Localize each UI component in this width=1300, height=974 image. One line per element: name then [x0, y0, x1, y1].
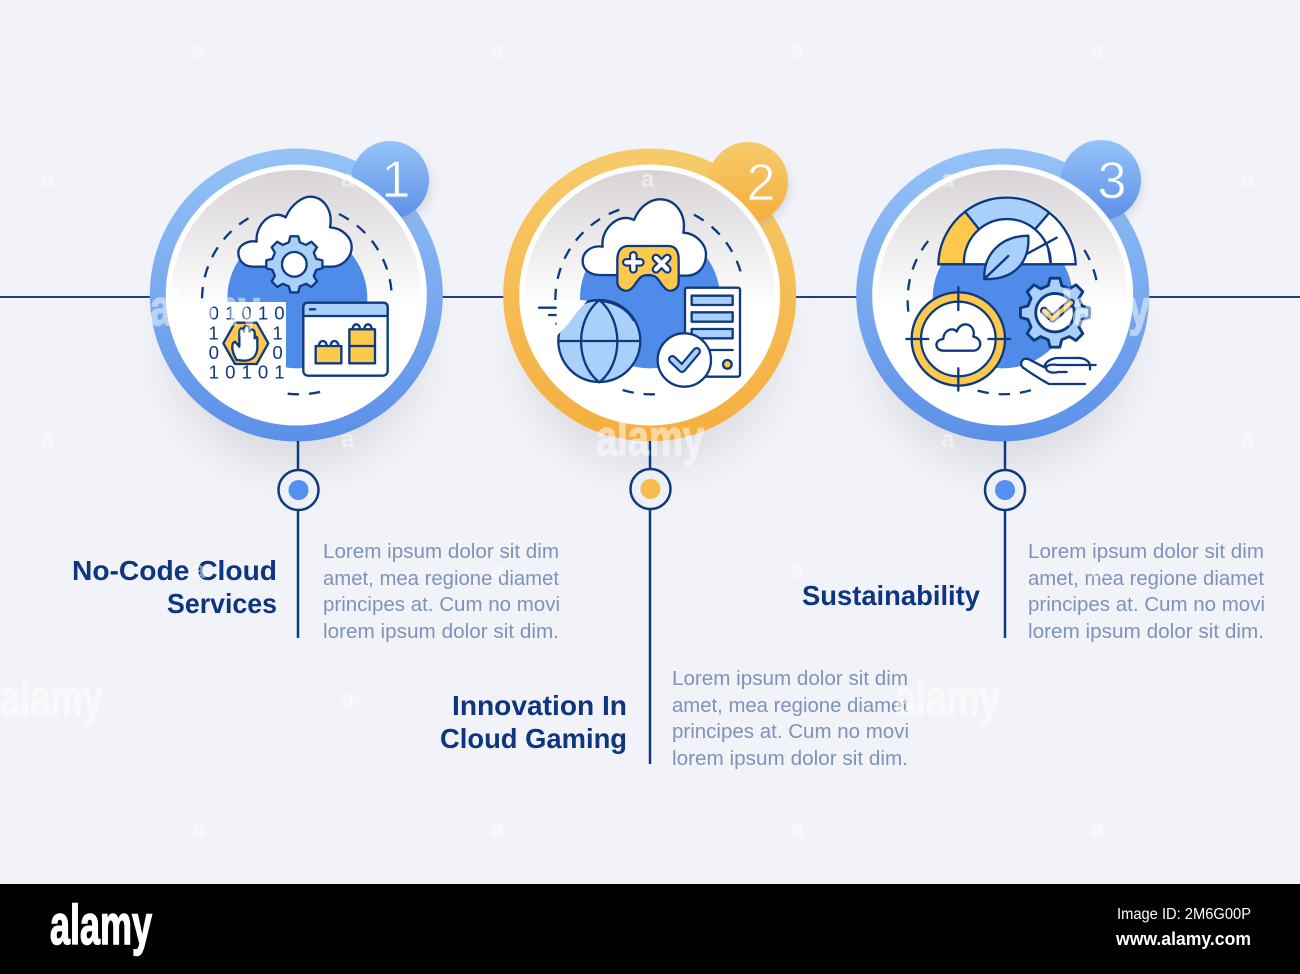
watermarks: alamy [895, 670, 1000, 726]
timeline marker 3 [985, 441, 1025, 638]
heading: No-Code Cloud Services: No-Code Cloud [72, 555, 277, 586]
text block: step 1 description [323, 541, 560, 643]
watermarks: a [192, 37, 206, 64]
text block: step 3 description: amet, mea regione diamet [1028, 568, 1264, 590]
icon: no-code cloud services: 0 [272, 342, 283, 363]
horizontal connector line [0, 296, 1300, 298]
text block: step 2 description: principes at. Cum no movi [672, 721, 909, 743]
watermarks: a [1241, 426, 1255, 453]
watermarks: a [192, 816, 206, 843]
watermarks: a [641, 166, 655, 193]
badge: number 3: 3 [1098, 152, 1126, 210]
footer bar [0, 884, 1300, 974]
watermarks: a [1091, 37, 1105, 64]
watermarks: a [491, 37, 505, 64]
heading: Innovation In Cloud Gaming: Cloud Gaming [440, 723, 627, 754]
watermarks: a [791, 557, 805, 584]
badge: number 3 [1061, 140, 1141, 221]
badge: number 2: 2 [747, 154, 775, 212]
watermarks: a [341, 166, 355, 193]
text block: step 1 description: amet, mea regione diamet [323, 568, 559, 590]
heading: No-Code Cloud Services: Services [167, 588, 277, 619]
watermarks: a [41, 426, 55, 453]
badge: number 1: 1 [382, 151, 410, 209]
badge: number 2 [708, 142, 788, 223]
watermarks: a [941, 426, 955, 453]
heading: Innovation In Cloud Gaming [440, 690, 627, 754]
image id: Image ID: 2M6G00P [1117, 906, 1251, 923]
text block: step 1 description: Lorem ipsum dolor sit dim [323, 541, 559, 563]
timeline marker 1 [278, 441, 318, 638]
icon: no-code cloud services: 01010 [209, 302, 285, 323]
text block: step 2 description: Lorem ipsum dolor sit dim [672, 668, 908, 690]
panel: step 2 circle [503, 142, 796, 467]
watermarks: a [491, 816, 505, 843]
heading: No-Code Cloud Services [72, 555, 277, 619]
icon: no-code cloud services: 1 [272, 322, 283, 343]
watermarks: a [192, 557, 206, 584]
watermarks: alamy [1040, 280, 1150, 336]
watermarks: a [791, 816, 805, 843]
text block: step 3 description [1028, 541, 1265, 643]
watermarks: alamy [0, 670, 103, 726]
heading: Sustainability: Sustainability [802, 580, 980, 611]
icon: no-code cloud services [202, 197, 392, 394]
text block: step 3 description: principes at. Cum no movi [1028, 594, 1265, 616]
badge: number 1 [351, 141, 429, 221]
panel: step 1 circle [150, 141, 443, 467]
heading: Innovation In Cloud Gaming: Innovation In [452, 690, 627, 721]
icon: no-code cloud services: 0 [209, 342, 219, 363]
timeline marker 2 [630, 441, 670, 764]
watermarks: a [791, 37, 805, 64]
text block: step 2 description [672, 668, 909, 770]
watermarks: a [41, 166, 55, 193]
watermarks: a [341, 426, 355, 453]
panel: step 3 circle [856, 140, 1149, 467]
website: www.alamy.com [1115, 929, 1251, 949]
icon: sustainability [906, 196, 1097, 394]
watermarks: alamy [150, 280, 260, 336]
watermarks: a [941, 166, 955, 193]
watermarks: a [491, 557, 505, 584]
watermarks [0, 37, 1255, 843]
text block: step 1 description: lorem ipsum dolor sit dim. [323, 621, 559, 643]
watermarks: a [1091, 557, 1105, 584]
footer logo: alamy [50, 893, 152, 956]
text block: step 2 description: amet, mea regione diamet [672, 695, 908, 717]
text block: step 3 description: lorem ipsum dolor sit dim. [1028, 621, 1264, 643]
text block: step 1 description: principes at. Cum no movi [323, 594, 560, 616]
icon: cloud gaming [539, 199, 742, 394]
text block: step 2 description: lorem ipsum dolor sit dim. [672, 748, 908, 770]
watermarks: a [341, 686, 355, 713]
icon: no-code cloud services: 10101 [209, 361, 285, 382]
watermarks: a [1241, 166, 1255, 193]
watermarks: a [1091, 816, 1105, 843]
icon: no-code cloud services: 1 [208, 322, 219, 343]
watermarks: alamy [596, 410, 704, 466]
text block: step 3 description: Lorem ipsum dolor sit dim [1028, 541, 1264, 563]
